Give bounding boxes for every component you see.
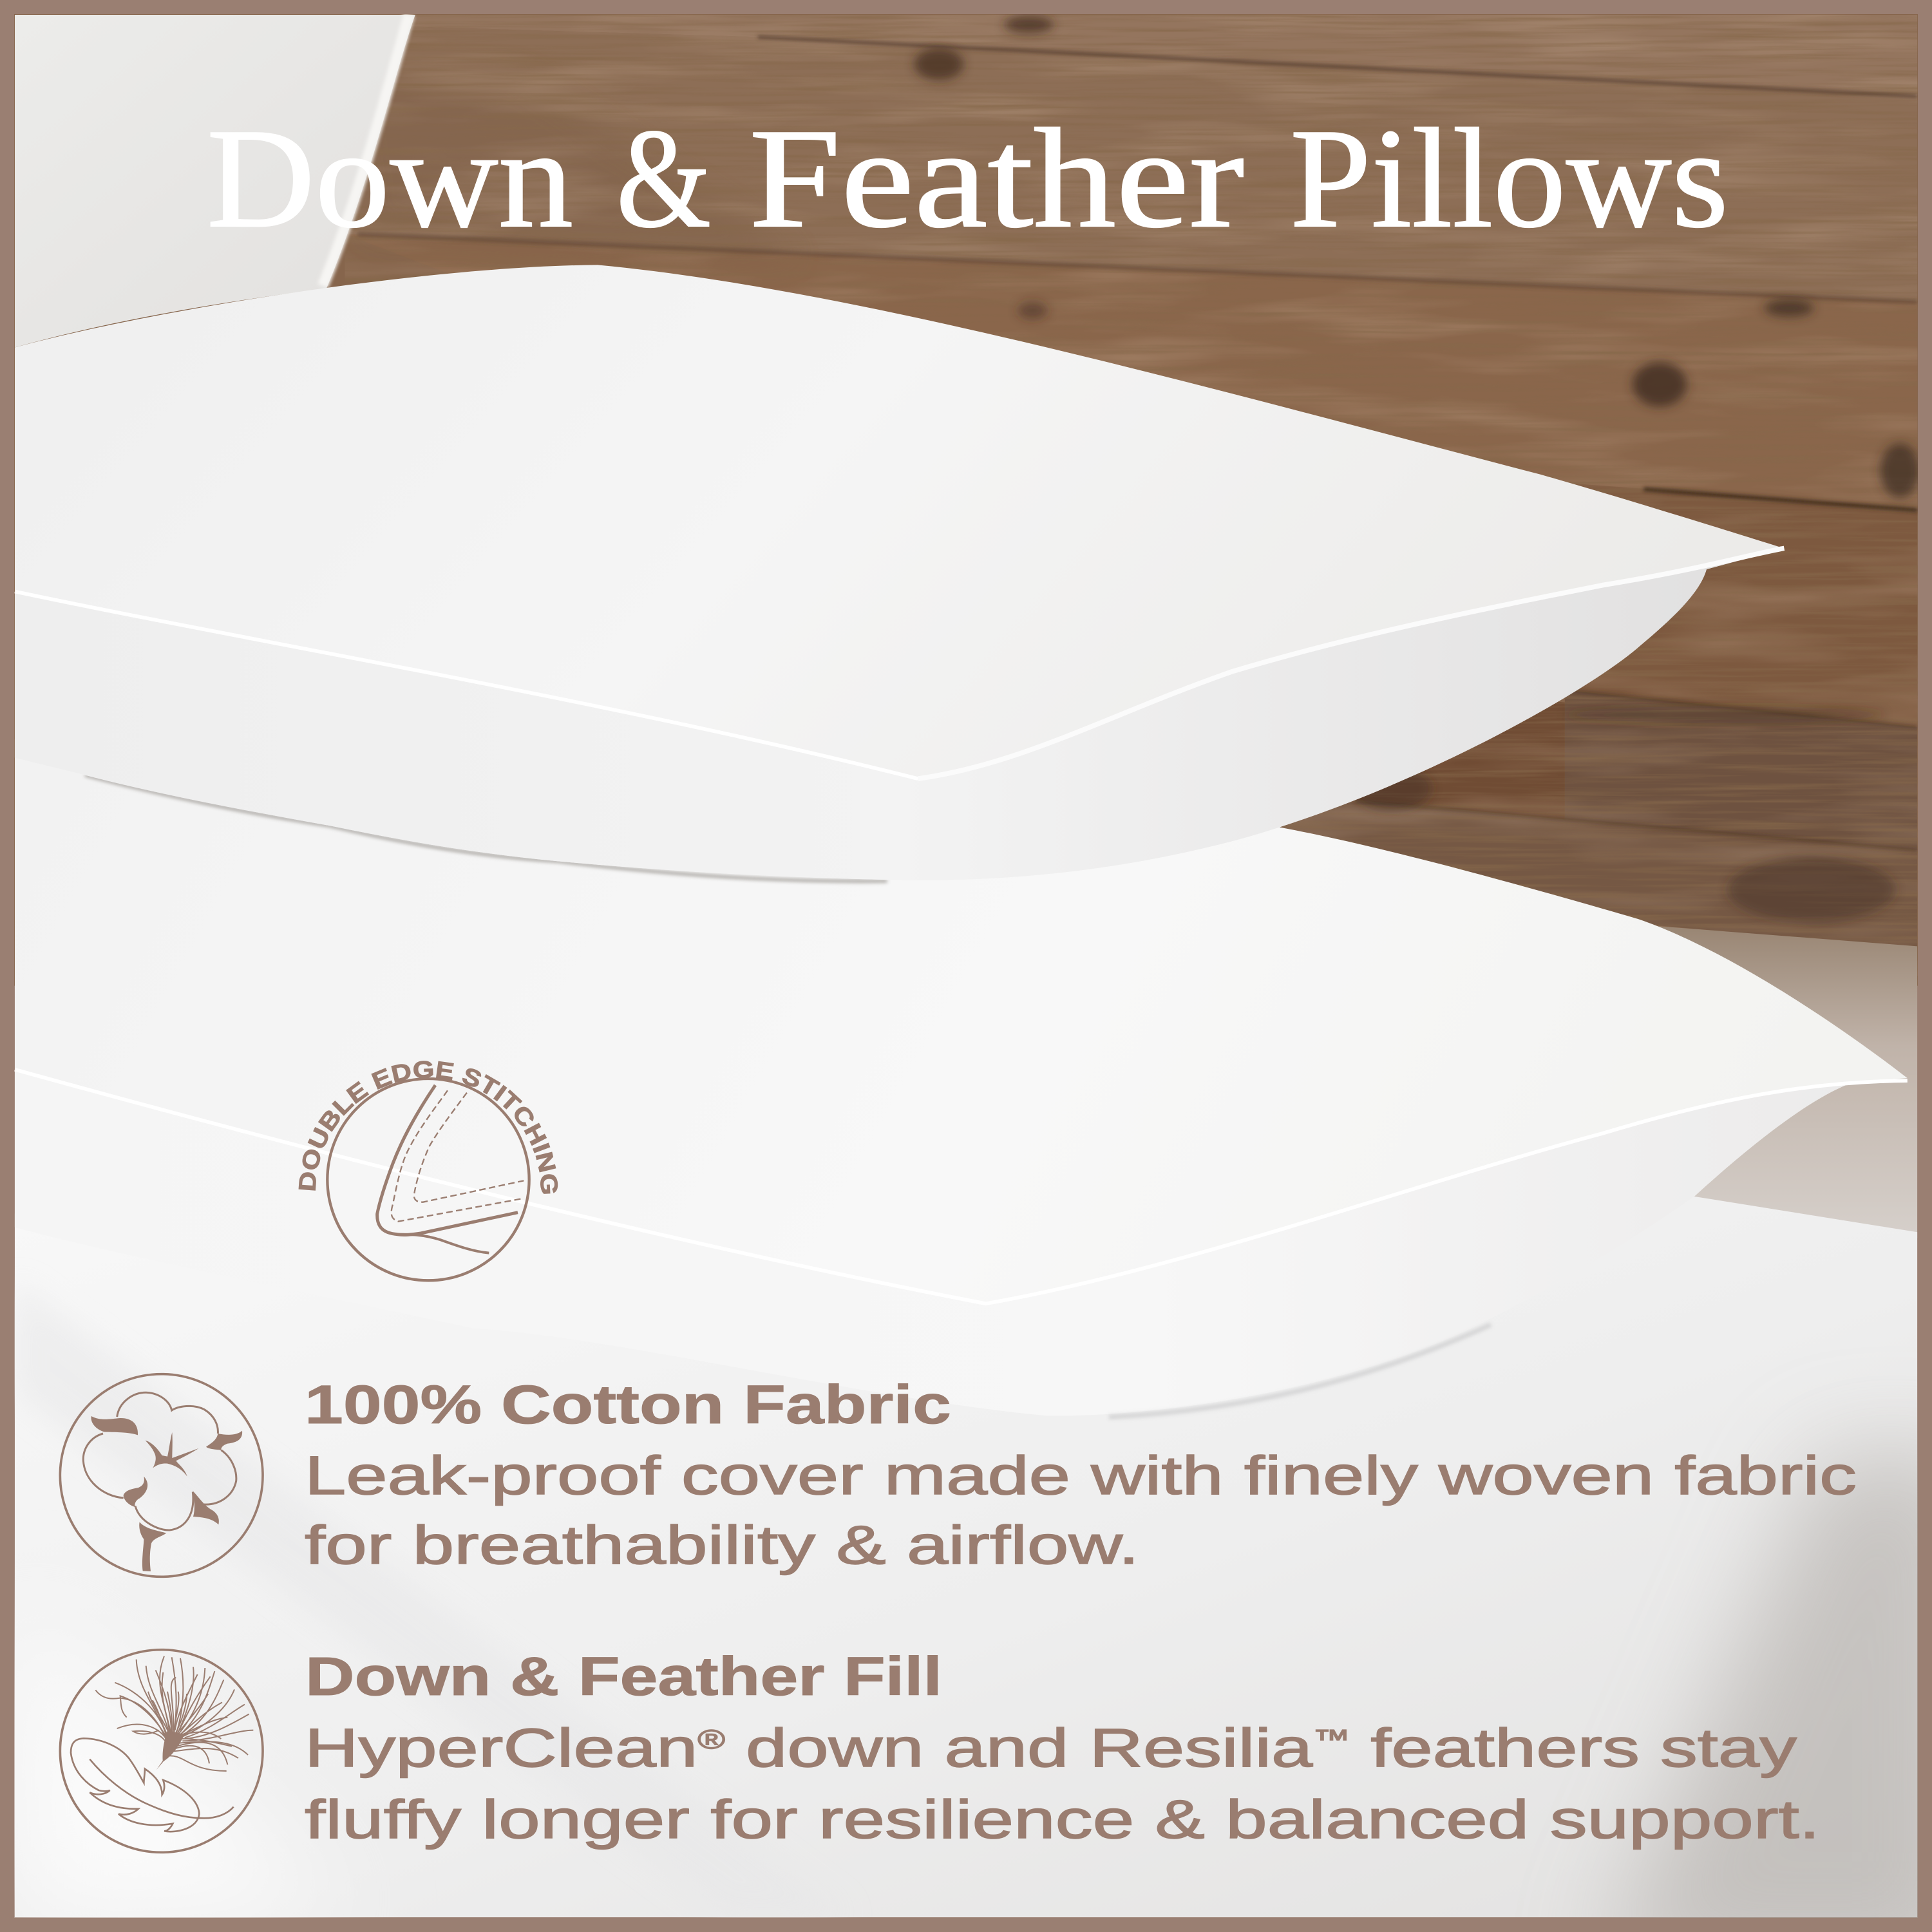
title: Pillows [1290, 99, 1728, 257]
body line one: Leak-proof cover made with finely woven fabric [305, 1445, 1857, 1506]
back pillow edge [323, 15, 409, 286]
icon: stitched pillow corner [327, 1079, 529, 1280]
body line one: HyperClean [305, 1718, 591, 1778]
heading: 100% Cotton Fabric: 100% Cotton Fabric [305, 1374, 951, 1435]
body line two: fluffy longer for resilience & balanced support. [305, 1789, 1820, 1850]
wood knots [914, 16, 1920, 922]
wood grain texture [345, 15, 1917, 976]
body line two: for breathability & airflow. [305, 1515, 1139, 1575]
feature text: down and feather fill [305, 1646, 1820, 1850]
title: & [616, 99, 711, 257]
title: Feather [749, 99, 1244, 257]
body line one: down and Resilia [725, 1718, 1313, 1778]
icon: cotton boll [60, 1374, 263, 1577]
bed sheet folds and shading [15, 1282, 1932, 1932]
shadow beneath top pillow [85, 775, 887, 881]
title [207, 99, 1728, 257]
badge: double edge stitching [299, 1061, 558, 1282]
back left pillow [15, 15, 415, 348]
pale wall and fade at lower right [1553, 918, 1917, 1238]
plank seams [357, 37, 1917, 850]
bed sheet [15, 1197, 1917, 1917]
icon: down and feather [60, 1650, 263, 1852]
badge arc label: DOUBLE EDGE STITCHING [299, 1061, 558, 1194]
wood headboard [0, 0, 1932, 986]
feature text: cotton fabric [305, 1374, 1857, 1575]
heading: Down & Feather Fill: Down & Feather Fill [305, 1646, 942, 1707]
lower pillow soft shadow on bed [1109, 1325, 1491, 1417]
body line one: ® [697, 1724, 725, 1754]
lower pillow [15, 739, 1908, 1416]
title: Down [207, 99, 573, 257]
body line one: feathers stay [1350, 1718, 1797, 1778]
body line one: ™ [1312, 1724, 1350, 1754]
top pillow [15, 265, 1784, 880]
